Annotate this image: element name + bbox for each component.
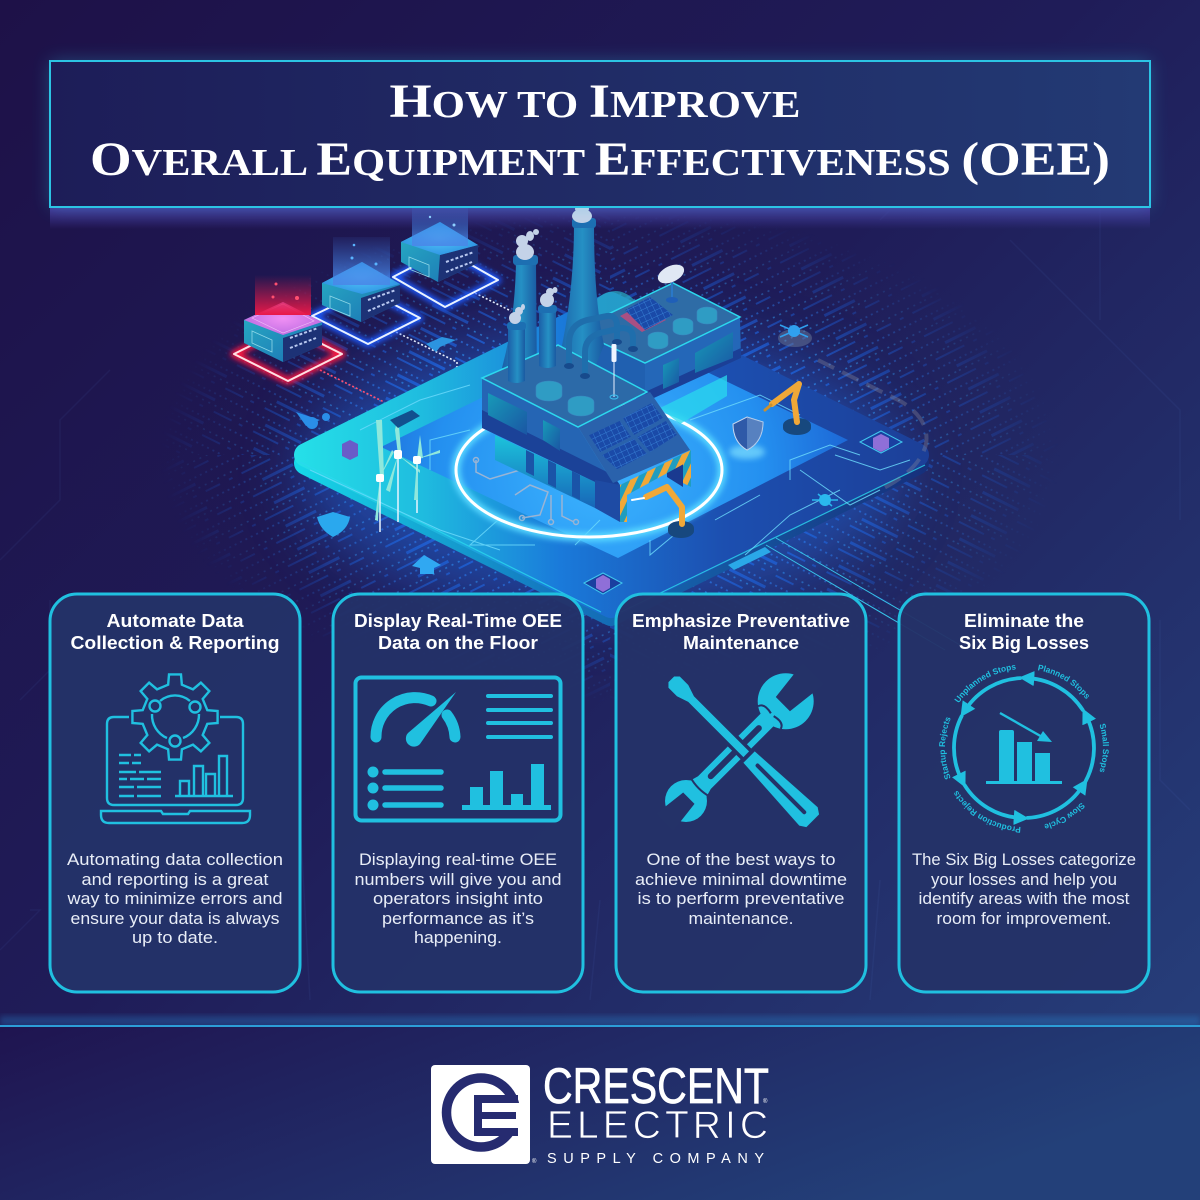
title text: HOW TO IMPROVE [390,75,800,128]
icon: dashboard [356,678,560,820]
front chimneys [507,305,557,383]
body text: way to minimize errors and [66,890,283,908]
icon: house [412,555,441,574]
pipes [569,316,633,375]
garage door hazard frame [620,450,691,522]
cycle labels [939,664,1109,833]
heading: Display Real-Time OEE [354,611,562,631]
pipe feet [564,339,638,379]
body text [354,851,562,947]
title text: OVERALL EQUIPMENT EFFECTIVENESS (OEE) [90,133,1110,186]
data cube: red [244,275,322,362]
body text: numbers will give you and [354,871,562,889]
body text: The Six Big Losses categorize [912,851,1136,869]
robot arm: garage [632,487,694,538]
title glow band [50,207,1150,229]
logo wordmark: ® [763,1098,768,1105]
illustration: isometric smart factory [234,205,960,650]
logo wordmark: SUPPLY COMPANY [547,1151,764,1167]
panel: six big losses [898,592,1150,994]
body text: room for improvement. [936,910,1112,928]
data cube: blue top [401,208,478,282]
blue data tiles [312,250,498,344]
body text: Displaying real-time OEE [359,851,557,869]
satellite dish [655,261,687,303]
body text: happening. [414,929,502,947]
platform [300,304,926,614]
icon: chip right [860,431,902,453]
body text [66,851,283,947]
icon: drone [426,337,456,352]
circuit board field [176,221,1044,694]
icon: chip left [342,440,358,460]
roof solar panels [588,402,678,470]
heading: Six Big Losses [959,633,1089,653]
body text: is to perform preventative [638,890,844,908]
heading: Collection & Reporting [70,633,280,653]
heading: Data on the Floor [378,633,538,653]
body text: operators insight into [373,890,543,908]
diagonal trace lines [766,538,960,650]
cycle labels: Unplanned Stops [954,665,1016,702]
heading [632,611,850,653]
logo wordmark [532,1058,769,1167]
icon: tractor left [296,412,330,429]
small isometric icons [296,325,902,594]
body text: ensure your data is always [70,910,280,928]
robot arm: right [765,384,811,435]
title text [90,75,1110,186]
icon: network node upper right [778,325,812,347]
body text: performance as it’s [382,910,534,928]
body text: Automating data collection [67,851,283,869]
body text: achieve minimal downtime [635,871,847,889]
icon: car on platform [390,410,420,428]
panel: real-time display [333,594,583,992]
rear chimneys [502,218,604,385]
icon: server bottom right [728,547,771,570]
body text: up to date. [132,929,218,947]
back roof solar panel [620,297,673,332]
panel: preventative maintenance [616,594,866,992]
heading: Maintenance [683,633,799,653]
heading: Emphasize Preventative [632,611,850,631]
cycle labels: Startup Rejects [939,717,950,780]
antenna probe [610,344,618,399]
connection lines [320,293,511,402]
body text: identify areas with the most [918,890,1130,908]
icon: chip bottom [584,573,622,594]
front roof tanks [536,381,594,416]
body text: and reporting is a great [82,871,269,889]
title panel [50,61,1150,207]
body text: maintenance. [688,910,794,928]
icon: loss cycle [939,664,1109,833]
inner bright floor [381,330,848,558]
back building [575,261,741,424]
cycle labels: Planned Stops [1038,664,1089,699]
glowing ring [456,403,722,537]
icon: shield badge left [317,512,350,537]
cycle labels: Production Rejects [954,791,1020,833]
faint background circuit [0,140,1190,1000]
grey chip traces [474,458,578,524]
icon: crossed tools [645,654,833,842]
heading [354,611,562,653]
body text: your losses and help you [931,871,1117,889]
soft platform glow [300,330,900,610]
data cube: blue middle [322,237,400,322]
footer band [0,1016,1200,1200]
heading: Automate Data [106,611,245,631]
logo wordmark: ® [532,1158,537,1165]
shield [729,417,765,459]
logo wordmark: CRESCENT [543,1058,769,1114]
heading [959,611,1089,653]
red data tile [234,327,342,381]
panel: automate data collection [50,594,300,992]
logo [431,1058,769,1167]
body text [912,851,1136,928]
main factory building [482,205,691,522]
wind turbines [375,415,440,532]
smoke plumes [509,205,592,324]
icon: node cluster right [812,494,838,506]
heading [70,611,280,653]
heading: Eliminate the [964,611,1084,631]
cycle labels: Slow Cycle [1044,803,1084,829]
cycle labels: Small Stops [1100,724,1109,772]
body text [635,851,847,928]
wrench [645,654,833,842]
icon: laptop with gear [101,674,250,823]
logo mark [431,1065,530,1164]
back roof tanks [648,307,717,349]
logo wordmark: ELECTRIC [547,1104,768,1147]
screwdriver [662,670,822,830]
dome behind back building [588,291,640,335]
body text: One of the best ways to [646,851,836,869]
floor circuit traces [310,385,910,555]
